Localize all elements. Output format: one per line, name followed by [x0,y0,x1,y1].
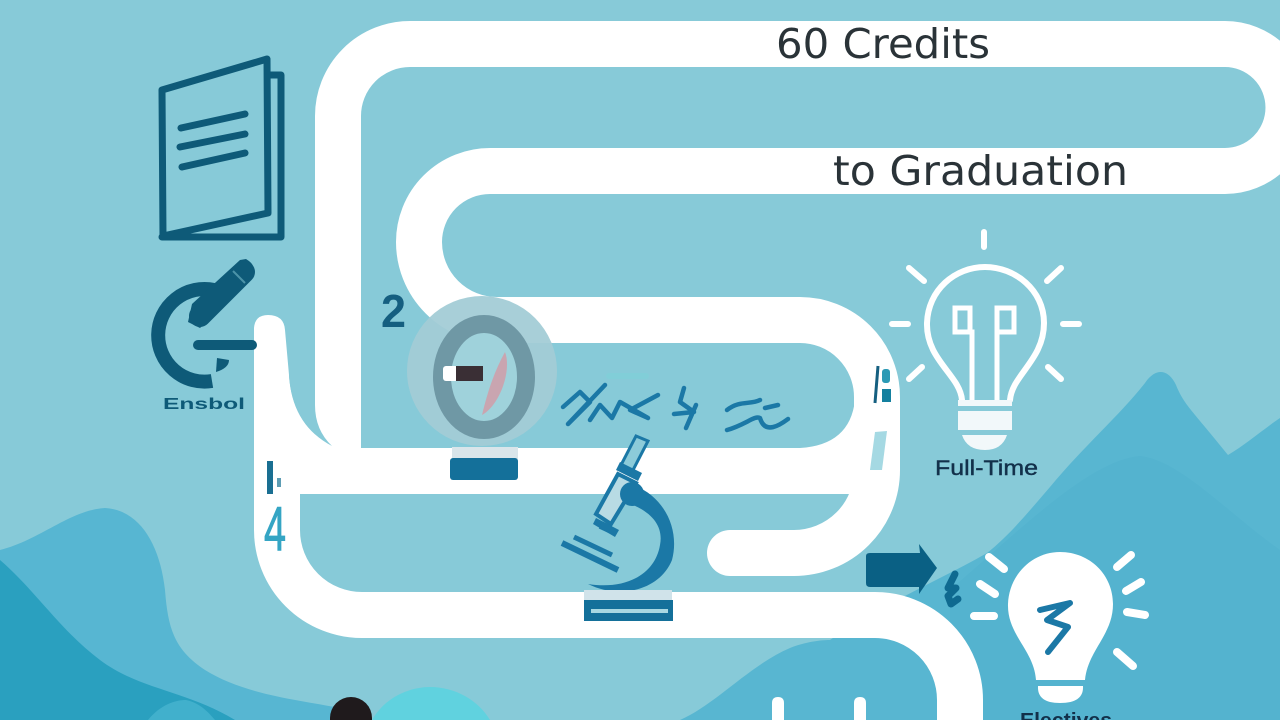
arrow [866,544,937,594]
figure: cyan circle [372,687,490,720]
icon: book [162,59,281,237]
white graduation path [254,44,1280,720]
icon: centre microscope [562,436,674,621]
label: left microscope: Ensbol [163,396,245,413]
background mountains: right [680,372,1280,720]
marker: 1 on right path [870,366,891,470]
figure: student head [330,697,372,720]
icon: solid light bulb [974,552,1145,703]
label: Full-Time: Full-Time [935,457,1038,480]
icon: magnifier [407,296,557,480]
scribbled handwriting [563,376,788,430]
marker: 2: 2 [381,285,406,337]
icon: outline light bulb [892,232,1079,450]
icon: left microscope [158,259,253,382]
small scribble by arrow [948,574,958,604]
background hills: left [0,508,360,720]
heading: 60 Credits: 60 Credits [776,20,990,68]
marker: 1 and 4 on left path [264,461,286,564]
marker: 1 and 4 on left path: 4 [264,495,286,564]
heading: to Graduation: to Graduation [833,147,1128,195]
